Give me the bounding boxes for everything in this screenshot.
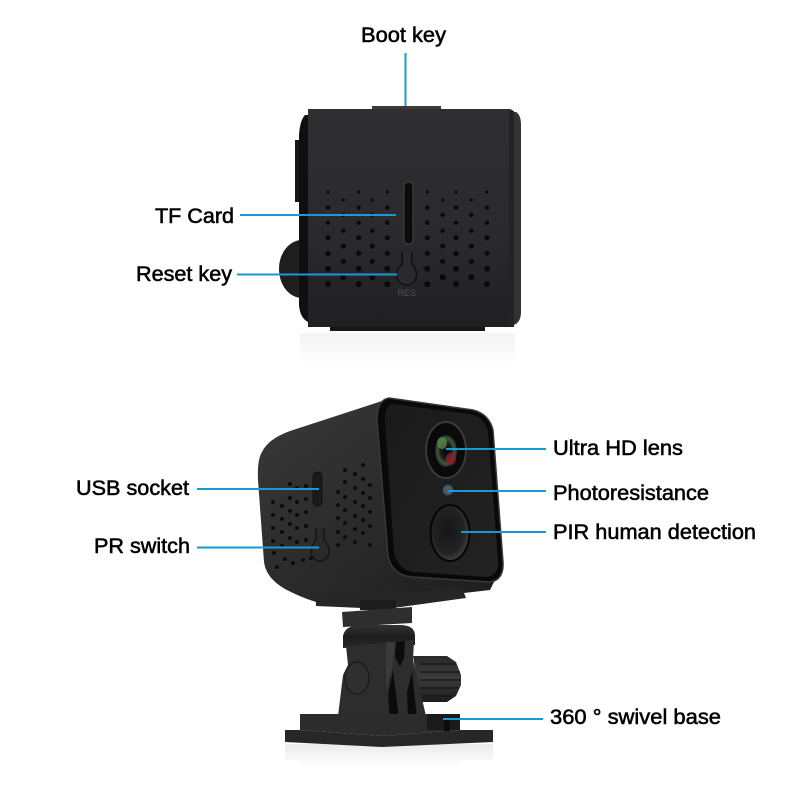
label: Ultra HD lens: Ultra HD lens	[553, 437, 683, 460]
lower plate	[285, 730, 493, 747]
reset keyhole	[396, 252, 416, 285]
label: PIR human detection: PIR human detection	[553, 521, 756, 544]
label: PR switch: PR switch	[94, 535, 190, 558]
speaker dots: rear view	[328, 192, 487, 284]
PR keyhole	[311, 528, 329, 561]
label: Boot key: Boot key	[361, 24, 447, 47]
upper plate	[300, 714, 460, 736]
printed RES: RES	[398, 288, 416, 298]
housing	[258, 399, 500, 602]
PIR sensor	[430, 505, 470, 561]
neck	[360, 600, 396, 610]
pivot bolt	[345, 662, 369, 694]
label: TF Card: TF Card	[155, 205, 234, 228]
front face	[377, 398, 503, 582]
speaker dots: front view	[273, 465, 370, 567]
label: USB socket: USB socket	[76, 477, 189, 500]
label: 360 swivel base: 360 ° swivel base	[550, 706, 721, 729]
label: Reset key: Reset key	[136, 263, 233, 286]
photoresistor	[442, 484, 454, 496]
knob	[413, 656, 461, 702]
mount plate under housing	[316, 588, 466, 609]
camera: front view	[258, 398, 503, 609]
arm	[338, 640, 426, 716]
collar nut	[342, 607, 412, 627]
lens	[426, 422, 466, 478]
reflection: swivel base	[285, 744, 493, 768]
swivel base	[285, 600, 493, 747]
leader lines	[197, 53, 546, 719]
label: Photoresistance: Photoresistance	[553, 482, 709, 505]
USB slot	[313, 472, 322, 506]
reflection: rear view	[300, 333, 515, 367]
camera: rear view	[279, 106, 521, 331]
TF card slot	[404, 182, 413, 244]
